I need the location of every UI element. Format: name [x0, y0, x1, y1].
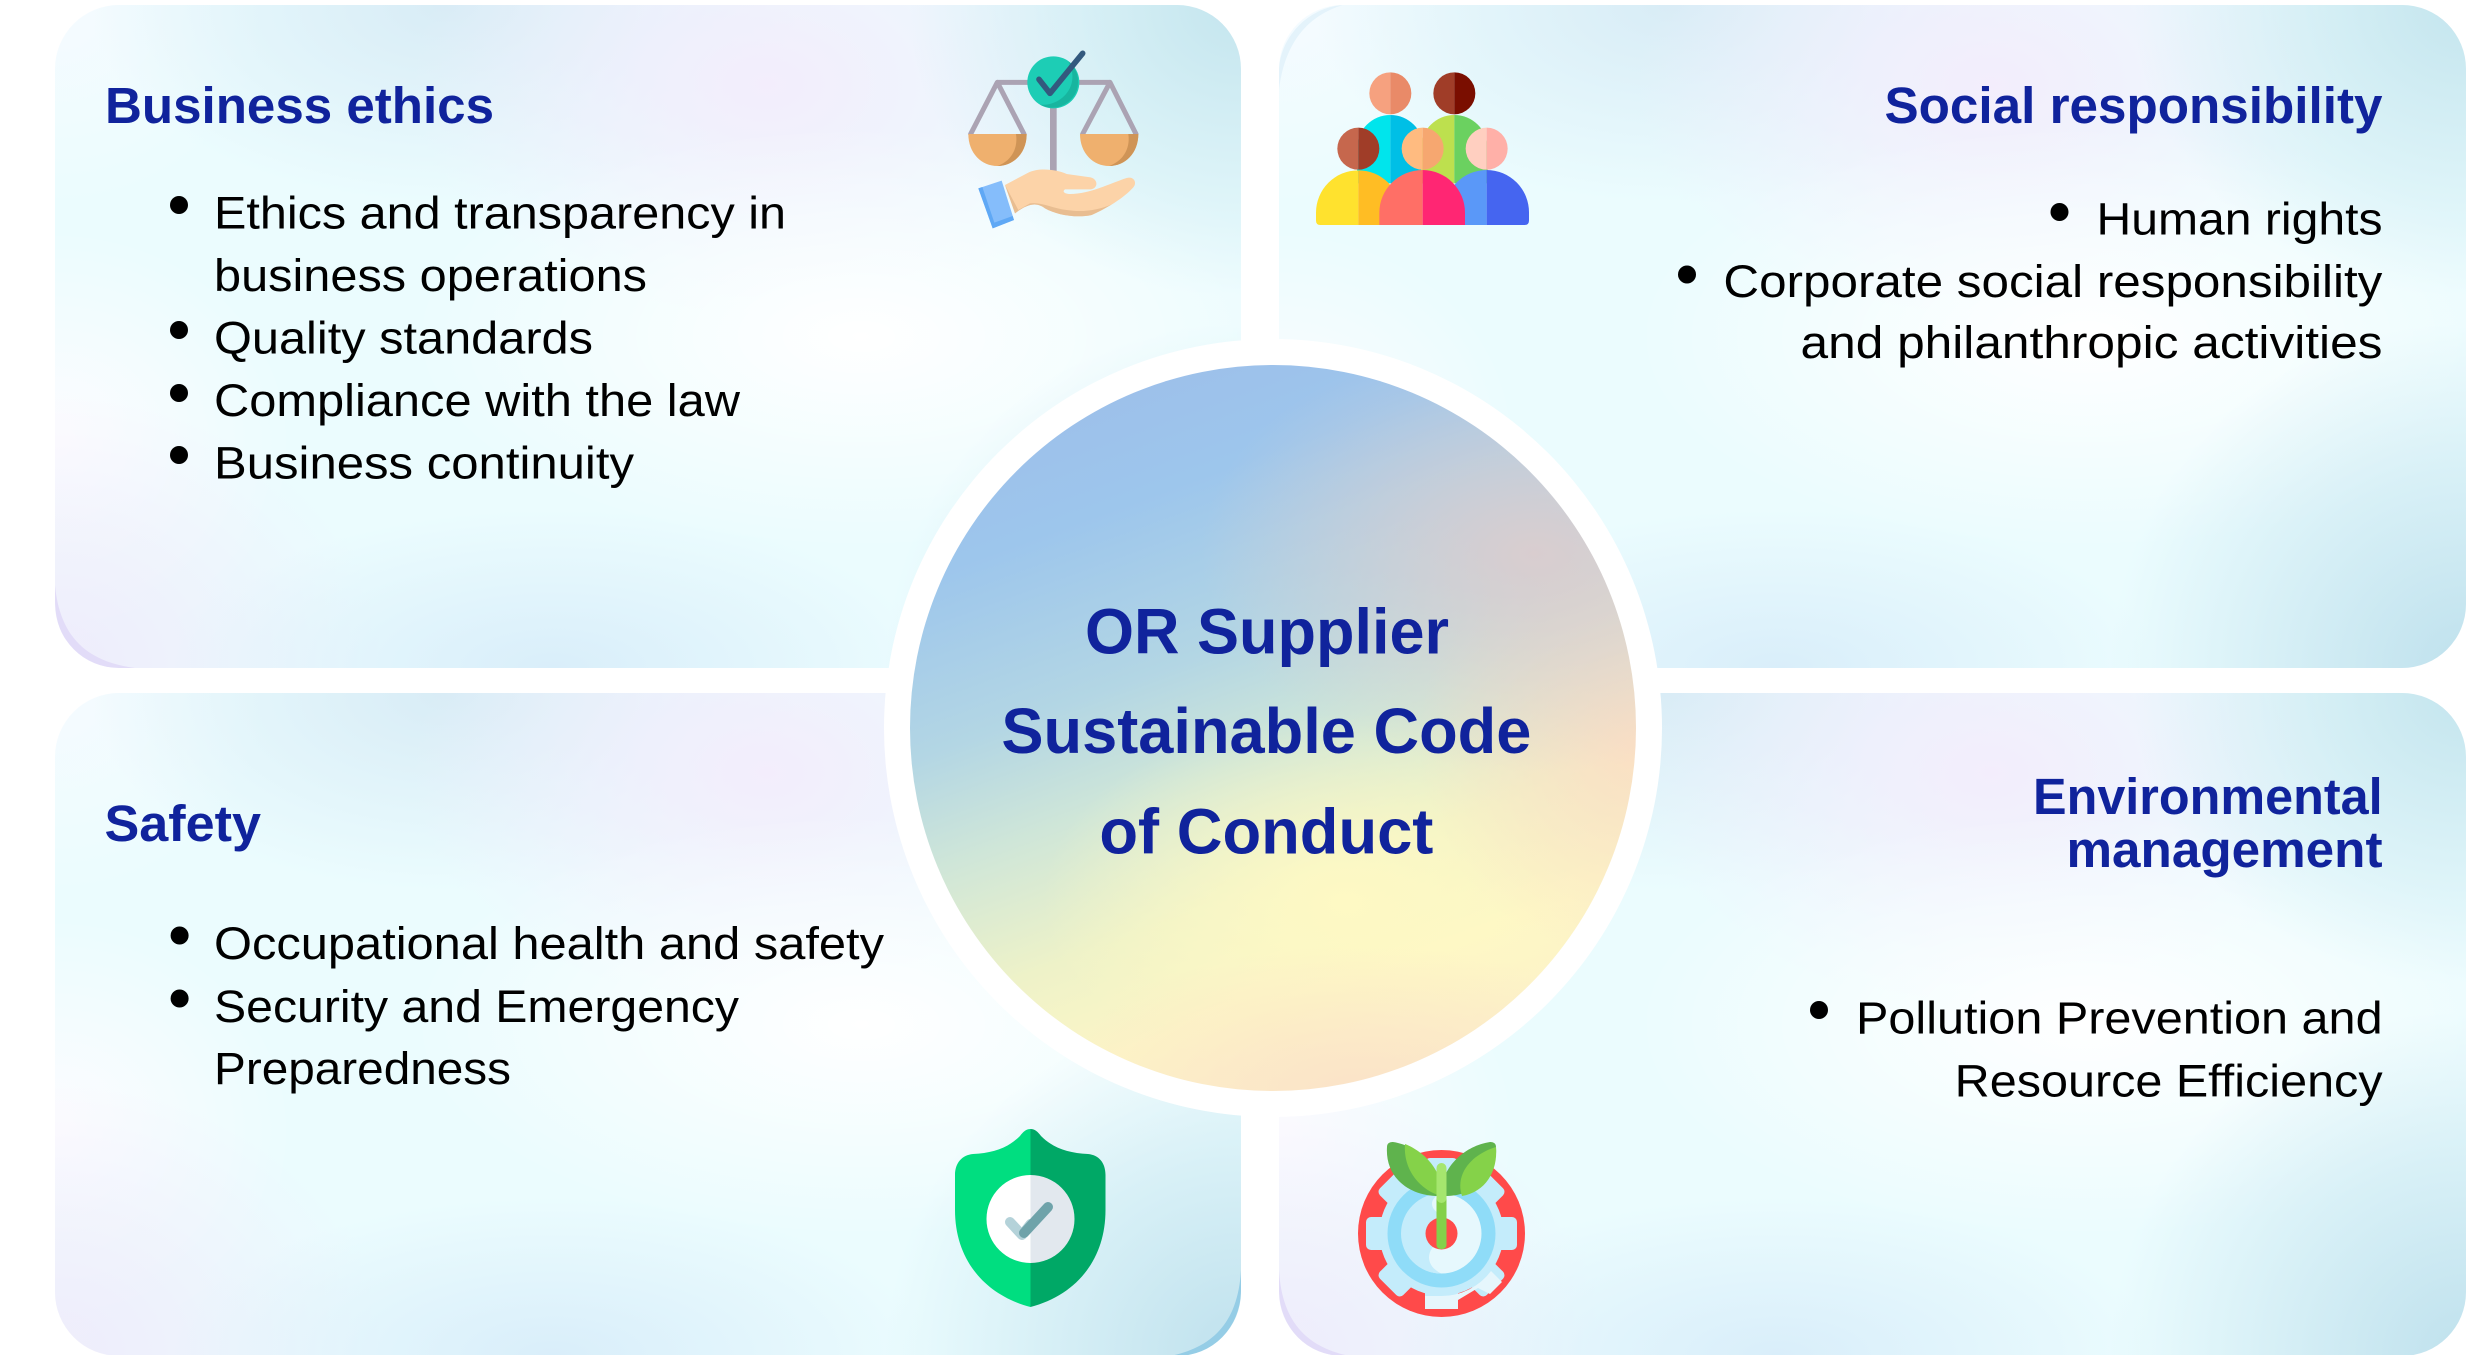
heading: Safety: Safety — [104, 795, 262, 852]
item: security and emergency preparedness — [171, 981, 740, 1094]
item: corporate social responsibility: Corporate social responsibility — [1723, 256, 2383, 307]
item: security and emergency preparedness: Preparedness — [214, 1043, 511, 1094]
heading: Social responsibility: Social responsibility — [1884, 77, 2383, 134]
icon: shield with check mark — [955, 1129, 1106, 1307]
panel: business ethics — [55, 5, 1241, 668]
corner accent — [1279, 1270, 1350, 1355]
corner accent — [55, 585, 135, 668]
item: human rights: Human rights — [2096, 193, 2382, 244]
hub title: Sustainable Code — [1001, 695, 1531, 767]
hub title — [1001, 595, 1531, 867]
item: ethics and transparency: business operations — [214, 250, 647, 301]
item: quality standards: Quality standards — [214, 313, 593, 364]
panel: social responsibility — [1279, 5, 2466, 668]
heading: Business ethics: Business ethics — [105, 77, 494, 134]
heading: Environmental management — [2033, 768, 2383, 878]
heading: Environmental management: management — [2066, 821, 2383, 878]
list: business ethics items — [170, 188, 786, 489]
corner accent — [1279, 5, 1343, 90]
icon: group of people — [1316, 72, 1529, 225]
list: environmental items — [1810, 992, 2383, 1106]
item: corporate social responsibility: and philanthropic activities — [1800, 317, 2382, 368]
item: ethics and transparency: Ethics and transparency in — [214, 188, 786, 239]
item: business continuity: Business continuity — [214, 438, 635, 489]
hub title: of Conduct — [1099, 795, 1433, 867]
item: pollution prevention and resource efficiency — [1810, 992, 2383, 1106]
item: ethics and transparency — [170, 188, 786, 301]
panel: environmental management — [1279, 693, 2466, 1355]
list: social responsibility items — [1678, 193, 2383, 368]
list: safety items — [171, 918, 885, 1094]
item: security and emergency preparedness: Security and Emergency — [214, 981, 740, 1032]
hub title: OR Supplier — [1085, 595, 1449, 667]
item: corporate social responsibility — [1678, 256, 2383, 368]
heading: Environmental management: Environmental — [2033, 768, 2383, 825]
item: pollution prevention and resource efficiency: Pollution Prevention and — [1856, 992, 2383, 1044]
item: compliance: Compliance with the law — [214, 375, 741, 426]
panel: safety — [55, 693, 1241, 1355]
item: occupational health and safety: Occupational health and safety — [214, 918, 885, 969]
item: pollution prevention and resource efficiency: Resource Efficiency — [1955, 1056, 2383, 1106]
corner accent — [1170, 1270, 1241, 1355]
icon: scales on a hand with check mark — [968, 53, 1138, 228]
icon: gear with sprout — [1358, 1142, 1525, 1317]
central hub: OR Supplier Sustainable Code of Conduct — [884, 339, 1662, 1117]
